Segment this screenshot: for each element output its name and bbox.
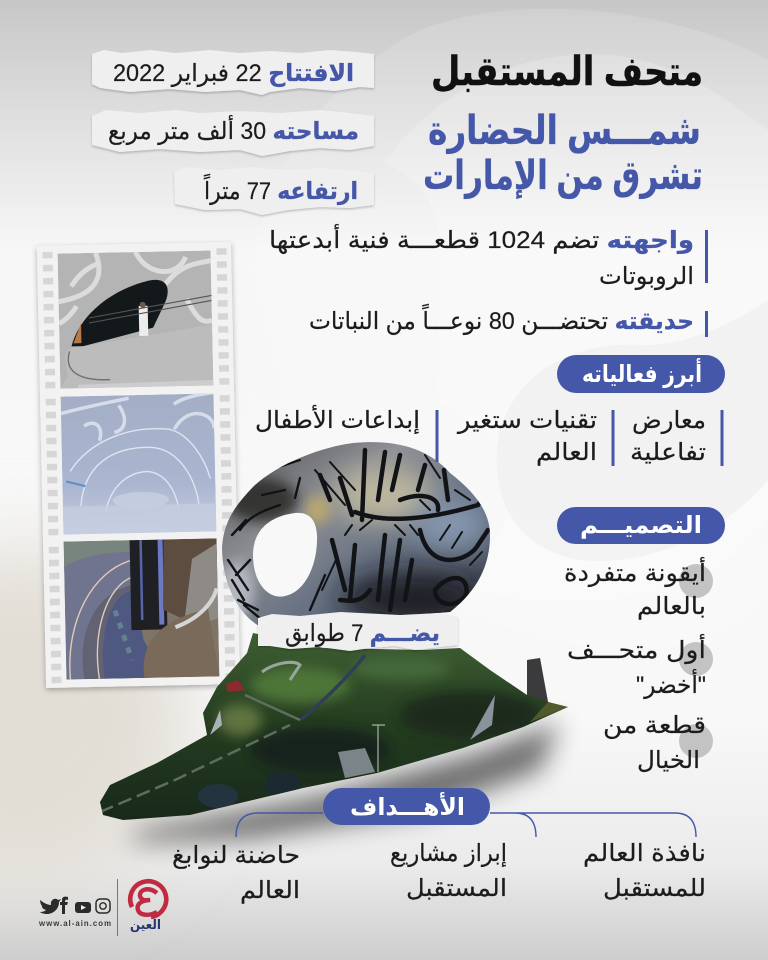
- fact: facade: الروبوتات: [599, 263, 694, 290]
- goal: incubator: [172, 842, 300, 904]
- design item: icon: [564, 557, 713, 620]
- floors label: يضـــم 7 طوابق: [285, 620, 440, 647]
- goal: incubator: حاضنة لنوابغ: [172, 842, 300, 869]
- subtitle: [423, 109, 703, 199]
- fact: facade: واجهته تضم 1024 قطعـــة فنية أبدعتها: [269, 224, 694, 254]
- activity: exhibitions: معارض: [632, 407, 706, 434]
- design item: icon: أيقونة متفردة: [564, 557, 706, 587]
- pill: activities heading: [557, 355, 725, 393]
- connector lines: [236, 813, 696, 837]
- activity: technologies: العالم: [536, 439, 597, 466]
- section: activities: [255, 355, 725, 466]
- design item: green: "أخضر": [636, 669, 706, 699]
- floors label: [258, 612, 458, 651]
- activity: technologies: [457, 407, 614, 466]
- design item: green: [567, 634, 713, 699]
- design item: fantasy: [603, 712, 713, 774]
- design item: fantasy: قطعة من: [603, 712, 706, 739]
- activity: exhibitions: [630, 407, 724, 466]
- info strip: opening date: الافتتاح 22 فبراير 2022: [113, 60, 354, 87]
- design item: green: أول متحـــف: [567, 634, 706, 664]
- film strip with photos: [37, 242, 240, 688]
- info strip: height: ارتفاعه 77 متراً: [203, 174, 358, 205]
- design item: icon: بالعالم: [637, 593, 706, 620]
- photo: facade opening: [58, 250, 213, 389]
- torus: [222, 442, 490, 626]
- goal: window: نافذة العالم: [583, 840, 706, 867]
- goal: projects: المستقبل: [406, 875, 507, 902]
- info strip: area: [92, 110, 374, 156]
- goal: window: [583, 840, 706, 902]
- pill: goals heading: الأهـــداف: [350, 792, 465, 821]
- website: www.al-ain.com: [38, 919, 111, 928]
- photo: interior atrium: [64, 538, 219, 680]
- goal: projects: إبراز مشاريع: [390, 840, 507, 868]
- pill: goals heading: [323, 788, 490, 825]
- goal: window: للمستقبل: [603, 875, 706, 902]
- activity: children: [255, 405, 438, 462]
- subtitle: شمـــس الحضارة: [428, 109, 701, 154]
- pill: activities heading: أبرز فعالياته: [582, 358, 702, 388]
- title: متحف المستقبل: [431, 50, 703, 94]
- section: goals: [172, 788, 706, 904]
- activity: exhibitions: تفاعلية: [630, 439, 706, 466]
- museum illustration: [100, 435, 568, 842]
- divider: [117, 879, 118, 936]
- info strip: height: [174, 167, 374, 215]
- design item: fantasy: الخيال: [637, 747, 700, 774]
- fact: garden: حديقته تحتضـــن 80 نوعـــاً من النباتات: [309, 304, 694, 335]
- calligraphy strokes: [228, 450, 488, 620]
- pill: design heading: [557, 507, 725, 544]
- social icons: [40, 897, 110, 914]
- goal: projects: [390, 840, 507, 902]
- photo: interior hall: [61, 392, 216, 535]
- section: design: [557, 507, 725, 774]
- pill: design heading: التصميـــم: [580, 512, 702, 539]
- footer branding: [38, 879, 166, 936]
- hill: [100, 633, 568, 820]
- fact: facade: [269, 224, 708, 290]
- activity: children: إبداعات الأطفال: [255, 405, 420, 435]
- activity: technologies: تقنيات ستغير: [457, 407, 597, 434]
- info strip: area: مساحته 30 ألف متر مربع: [108, 115, 359, 145]
- logo: العين: [130, 917, 161, 932]
- goal: incubator: العالم: [240, 877, 300, 904]
- hill shadow: [130, 722, 560, 842]
- info strip: opening date: [92, 50, 374, 95]
